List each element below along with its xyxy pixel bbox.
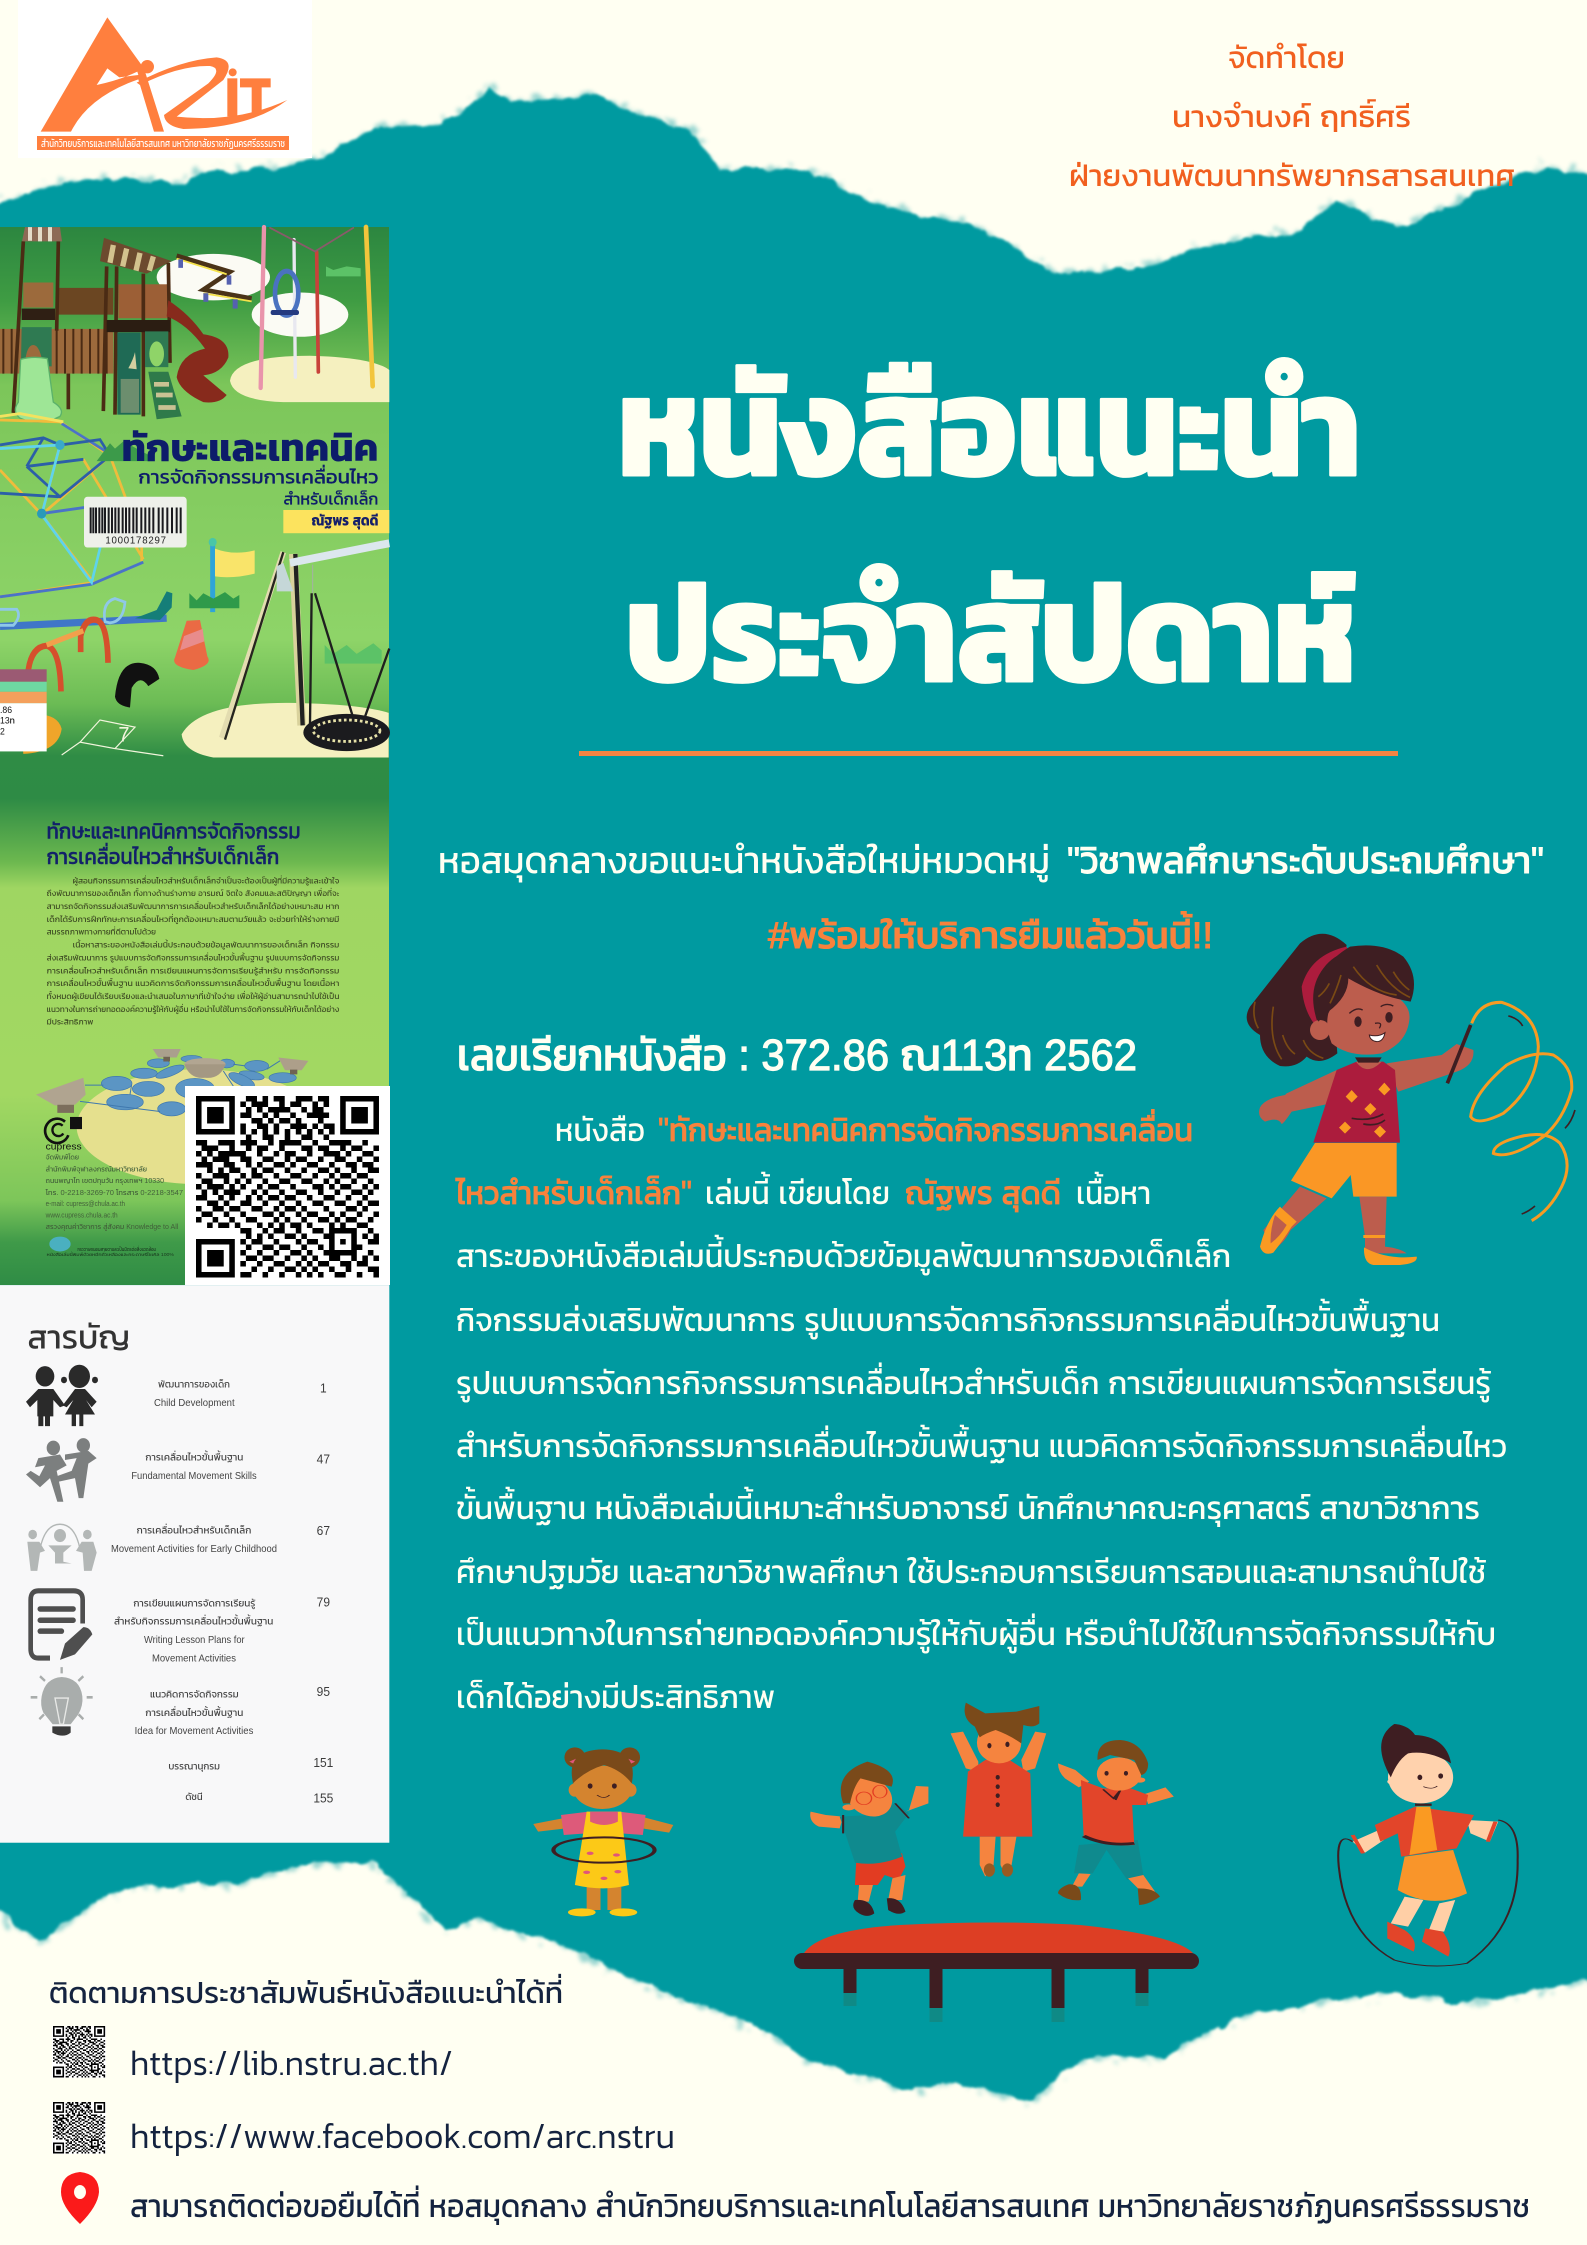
intro paragraph: หอสมุดกลางขอแนะนำหนังสือใหม่หมวดหมู่ [438,840,1050,883]
back cover heading [47,819,301,869]
call number: เลขเรียกหนังสือ : 372.86 ณ113ท 2562 [457,1031,1137,1080]
contents entries: ดัชนี [185,1790,203,1802]
large QR code [185,1086,390,1285]
barcode sticker [84,497,187,547]
icon: document and pencil [31,1591,92,1660]
logo: AR2IT [18,0,312,158]
icon: light bulb [31,1667,93,1736]
book contents page [0,1285,389,1843]
book description paragraph: ศึกษาปฐมวัย และสาขาวิชาพลศึกษา ใช้ประกอบการเรียนการสอนและสามารถนำไปใช้ [456,1553,1486,1590]
contents entries: บรรณานุกรม [168,1760,220,1771]
cupress logo: cupress [46,1140,82,1151]
back cover blurb [47,873,340,1027]
contents entries: การเคลื่อนไหวขั้นพื้นฐาน [145,1450,244,1462]
contents entries: การเขียนแผนการจัดการเรียนรู้ [133,1597,256,1610]
spine label: 13ท [0,715,15,726]
contents page numbers: 47 [317,1452,330,1467]
hashtag: #พร้อมให้บริการยืมแล้ววันนี้!! [768,912,1213,956]
author band [283,510,389,533]
back cover blurb: สามารถจัดกิจกรรมส่งเสริมพัฒนาการการเคลื่อนไหวสำหรับเด็กเล็กได้อย่างเหมาะสม หาก [47,899,339,911]
rocker [275,271,298,315]
back cover heading: ทักษะและเทคนิคการจัดกิจกรรม [47,819,301,843]
book description paragraph: ขั้นพื้นฐาน หนังสือเล่มนี้เหมาะสำหรับอาจารย์ นักศึกษาคณะครุศาสตร์ สาขาวิชาการ [456,1487,1480,1527]
seesaw [0,618,167,626]
illustration: girl in red dress jumping [951,1703,1046,1877]
illustration: boy with glasses jumping [810,1762,928,1916]
contents entries: Movement Activities [152,1652,236,1663]
book description paragraph: สาระของหนังสือเล่มนี้ประกอบด้วยข้อมูลพัฒนาการของเด็กเล็ก [456,1235,1231,1276]
illustration: girl with hula hoop [533,1747,673,1916]
book description paragraph: สำหรับการจัดกิจกรรมการเคลื่อนไหวขั้นพื้นฐาน แนวคิดการจัดกิจกรรมการเคลื่อนไหว [456,1425,1507,1464]
contents entries: การเคลื่อนไหวสำหรับเด็กเล็ก [137,1523,252,1535]
contents page numbers: 67 [317,1523,330,1538]
link: facebook page: https://www.facebook.com/arc.nstru [130,2109,675,2163]
red tube slide [167,300,228,402]
cupress logo [45,1117,82,1151]
book description paragraph: รูปแบบการจัดการกิจกรรมการเคลื่อนไหวสำหรับเด็ก การเขียนแผนการจัดการเรียนรู้ [456,1362,1491,1403]
spine label [0,669,62,754]
back cover blurb: ถึงพัฒนาการของเด็กเล็ก ทั้งทางด้านร่างกาย อารมณ์ จิตใจ สังคมและสติปัญญา เพื่อที่จะ [47,886,340,898]
book back cover: หนังสือเล่มนี้พิมพ์ด้วยหมึกถั่วเหลืองและกระดาษรีไซเคิล 100% [47,1251,174,1257]
swing frame [261,227,373,388]
credit block: organised by: ฝ่ายงานพัฒนาทรัพยากรสารสนเทศ [1069,158,1515,193]
book description paragraph: กิจกรรมส่งเสริมพัฒนาการ รูปแบบการจัดการกิจกรรมการเคลื่อนไหวขั้นพื้นฐาน [456,1299,1440,1340]
back cover stepping-stone playground [36,1049,323,1184]
back cover blurb: เนื้อหาสาระของหนังสือเล่มนี้ประกอบด้วยข้อมูลพัฒนาการของเด็กเล็ก กิจกรรม [73,939,339,951]
cover title: ทักษะและเทคนิค [122,427,378,470]
book description paragraph: เนื้อหา [1076,1172,1151,1211]
icon: running children [26,1438,97,1502]
contents entries: Writing Lesson Plans for [144,1634,245,1645]
contents entries: การเคลื่อนไหวขั้นพื้นฐาน [145,1705,244,1718]
contents entries [111,1378,277,1802]
illustration: boy in red shirt jumping [1058,1740,1174,1905]
publisher details: โทร. 0-2218-3269-70 โทรสาร 0-2218-3547 [45,1188,183,1197]
back cover blurb: การเคลื่อนไหวสำหรับเด็กเล็ก การเขียนแผนการจัดการเรียนรู้สำหรับ การจัดกิจกรรม [47,963,339,976]
book description paragraph: ไหวสำหรับเด็กเล็ก" [455,1174,692,1211]
intro paragraph [438,840,1544,883]
play structure [0,227,228,422]
back cover blurb: แนวทางในการถ่ายทอดองค์ความรู้ให้กับผู้อื่น หรือนำไปใช้ในการจัดกิจกรรมให้กับเด็กได้อย่าง [47,1002,340,1015]
back cover blurb: ส่งเสริมพัฒนาการ รูปแบบการจัดกิจกรรมการเคลื่อนไหวขั้นพื้นฐาน รูปแบบการจัดกิจกรรม [47,950,339,963]
contents page numbers [313,1381,333,1806]
publisher details: www.cupress.chula.ac.th [45,1211,118,1220]
contents page numbers: 79 [317,1595,330,1610]
QR code: facebook page [52,2102,106,2154]
publisher details: จัดพิมพ์โดย [46,1152,79,1162]
back cover blurb: การเคลื่อนไหวขั้นพื้นฐาน แนวคิดการจัดกิจกรรมการเคลื่อนไหวขั้นพื้นฐาน โดยเนื้อหา [47,976,340,988]
publisher details: สำนักพิมพ์จุฬาลงกรณ์มหาวิทยาลัย [46,1164,147,1173]
back cover blurb: ทั้งหมดผู้เขียนได้เรียบเรียงและนำเสนอในภาษาที่เข้าใจง่าย เพื่อให้ผู้อ่านสามารถนำไปใช้เป็น [47,989,339,1002]
book description paragraph: เป็นแนวทางในการถ่ายทอดองค์ความรู้ให้กับผู้อื่น หรือนำไปใช้ในการจัดกิจกรรมให้กับ [456,1613,1496,1654]
book front cover [0,227,390,757]
ribbon stick [1447,1025,1471,1083]
contents heading: สารบัญ [27,1318,130,1356]
logo banner [37,136,289,150]
tyre [115,663,159,707]
book description paragraph: "ทักษะและเทคนิคการจัดกิจกรรมการเคลื่อน [658,1109,1193,1148]
icon: location pin [61,2172,99,2224]
spine label: 2 [0,726,5,736]
contents entries: Child Development [154,1397,235,1408]
contents entries: พัฒนาการของเด็ก [158,1378,230,1390]
main title [618,348,1361,711]
flag and grass [205,543,220,612]
contents entries: สำหรับกิจกรรมการเคลื่อนไหวขั้นพื้นฐาน [114,1614,274,1627]
back cover blurb: สมรรถภาพทางกายที่ดีตามไปด้วย [47,925,156,937]
back cover blurb: ผู้สอนกิจกรรมการเคลื่อนไหวสำหรับเด็กเล็กจำเป็นจะต้องเป็นผู้ที่มีความรู้และเข้าใจ [73,873,340,886]
book back cover [36,819,340,1257]
book photo column [0,227,390,1843]
illustration: girl skipping rope [1338,1724,1518,1966]
link: library website: https://lib.nstru.ac.th/ [130,2036,453,2090]
cover title [122,427,378,509]
book description paragraph: หนังสือ [555,1111,645,1148]
book back cover: กระดาษถนอมสายตาและเป็นมิตรต่อสิ่งแวดล้อม [77,1246,156,1253]
credit block: organised by [1069,40,1515,193]
contents entries: Idea for Movement Activities [135,1725,254,1736]
contents page numbers: 151 [313,1756,333,1770]
barcode sticker: 1000178297 [105,535,166,547]
illustration: girl with ribbon [1247,934,1575,1265]
book description paragraph: เด็กได้อย่างมีประสิทธิภาพ [456,1678,775,1715]
back cover blurb: มีประสิทธิภาพ [47,1017,93,1027]
illustration: trampoline [794,1922,1199,2022]
contents page numbers: 1 [320,1381,327,1395]
icon: skipping rope group [27,1524,97,1571]
book description paragraph [455,1109,1507,1715]
book description paragraph: เล่มนี้ เขียนโดย [705,1172,890,1211]
green slide [15,357,61,422]
spine label: .86 [0,705,12,715]
follow heading: ติดตามการประชาสัมพันธ์หนังสือแนะนำได้ที่ [49,1972,563,2010]
logo mark: letter A, swoosh and IT [41,17,287,132]
contents entries: แนวคิดการจัดกิจกรรม [150,1688,239,1699]
climbing dome [0,414,143,597]
traffic cone [174,620,209,670]
publisher details: e-mail: cupress@chula.ac.th [46,1199,125,1208]
back cover heading: การเคลื่อนไหวสำหรับเด็กเล็ก [47,842,279,869]
contents page numbers: 95 [317,1684,330,1699]
intro paragraph: "วิชาพลศึกษาระดับประถมศึกษา" [1067,840,1544,881]
publisher details: ถนนพญาไท เขตปทุมวัน กรุงเทพฯ 10330 [46,1176,164,1185]
book front cover: 7 [118,723,129,747]
contents page numbers: 155 [313,1791,333,1806]
main title: หนังสือแนะนำ [618,348,1361,505]
cover title: การจัดกิจกรรมการเคลื่อนไหว [138,465,378,488]
icon: boy and girl [26,1365,98,1426]
contents entries: Movement Activities for Early Childhood [111,1543,277,1554]
publisher details [45,1152,183,1231]
main title: ประจำสัปดาห์ [625,554,1356,711]
A-frame swing [222,543,389,740]
back cover blurb: เด็กได้รับการฝึกทักษะการเคลื่อนไหวที่ถูกต้องเหมาะสมตามวัยแล้ว จะช่วยทำให้ร่างกายมี [47,912,339,925]
author band: ณัฐพร สุดดี [312,512,378,530]
QR code: library website [52,2026,106,2078]
logo banner: สำนักวิทยบริการและเทคโนโลยีสารสนเทศ มหาวิทยาลัยราชภัฏนครศรีธรรมราช [41,138,285,150]
publisher details: สรวงคุณค่าวิชาการ สู่สังคม Knowledge to All [46,1222,179,1231]
ribbon [1471,1002,1572,1221]
credit block: organised by: นางจำนงค์ ฤทธิ์ศรี [1172,98,1411,134]
contents entries: Fundamental Movement Skills [131,1469,257,1481]
book description paragraph: ณัฐพร สุดดี [905,1174,1061,1212]
cover title: สำหรับเด็กเล็ก [283,490,378,509]
credit block: organised by: จัดทำโดย [1228,40,1345,75]
